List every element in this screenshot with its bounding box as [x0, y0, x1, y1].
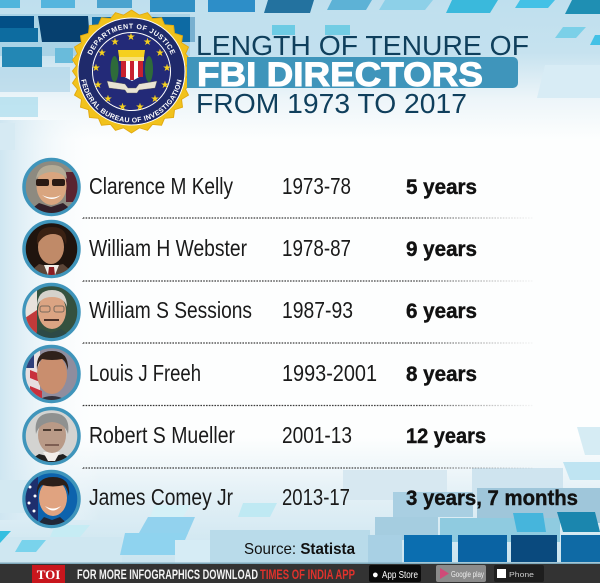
seal stars: ★ — [94, 80, 103, 91]
footer red text: TIMES OF INDIA APP — [260, 566, 355, 582]
FBI seal: FEDERAL BUREAU OF INVESTIGATION — [81, 79, 182, 122]
portrait: Mueller — [24, 408, 79, 464]
title highlight bar — [187, 57, 518, 88]
seal stars: ★ — [156, 48, 165, 59]
row: Louis J Freeh — [24, 346, 477, 402]
seal stars: ★ — [118, 102, 127, 113]
seal ring text: DEPARTMENT OF JUSTICE — [87, 24, 176, 55]
seal stars: ★ — [151, 94, 160, 105]
years in office: 1978-87 — [282, 235, 351, 261]
row dividers — [83, 218, 533, 468]
seal stars: ★ — [98, 48, 107, 59]
seal stars: ★ — [136, 102, 145, 113]
top blue tile pattern — [0, 0, 600, 150]
name: Clarence M Kelly — [89, 173, 233, 199]
row: William S Sessions — [24, 284, 477, 340]
name: William S Sessions — [89, 297, 252, 323]
title line 1: LENGTH OF TENURE OF — [196, 30, 529, 61]
portrait: Comey — [24, 472, 79, 526]
FBI seal — [72, 10, 190, 134]
seal shield — [107, 50, 157, 93]
years in office: 1993-2001 — [282, 360, 377, 386]
footer text: FOR MORE INFOGRAPHICS DOWNLOAD — [77, 566, 258, 582]
row: Clarence M Kelly — [24, 160, 477, 214]
tenure: 5 years — [406, 176, 477, 199]
name: Robert S Mueller — [89, 422, 235, 448]
seal gold serrated edge — [72, 10, 190, 133]
bottom blue tile pattern — [0, 427, 600, 563]
tenure: 3 years, 7 months — [406, 487, 578, 510]
TOI logo — [32, 565, 65, 583]
app store badge: App Store — [382, 570, 418, 581]
years in office: 1987-93 — [282, 297, 353, 323]
row: William H Webster — [24, 222, 477, 276]
title — [187, 30, 529, 119]
seal stars: ★ — [104, 94, 113, 105]
tenure: 9 years — [406, 238, 477, 261]
portrait: Webster — [24, 222, 79, 276]
row: James Comey Jr — [24, 472, 578, 526]
seal stars: ★ — [127, 32, 136, 43]
source: Source: Statista — [244, 541, 355, 558]
google play badge: Google play — [451, 570, 484, 579]
name: Louis J Freeh — [89, 360, 201, 386]
years in office: 1973-78 — [282, 173, 351, 199]
portrait: Freeh — [24, 346, 79, 402]
tenure: 6 years — [406, 300, 477, 323]
years in office: 2013-17 — [282, 484, 350, 510]
app store badge — [369, 565, 421, 582]
title line 2: FBI DIRECTORS — [197, 56, 483, 94]
tenure: 8 years — [406, 363, 477, 386]
seal stars: ★ — [92, 63, 101, 74]
portrait: Sessions — [24, 284, 79, 340]
name: William H Webster — [89, 235, 247, 261]
TOI logo: TOI — [37, 567, 60, 582]
seal stars — [92, 32, 172, 113]
seal stars: ★ — [161, 80, 170, 91]
app store badge: ● — [372, 569, 379, 581]
tenure: 12 years — [406, 425, 486, 448]
portrait: Kelly — [24, 160, 80, 214]
title line 3: FROM 1973 TO 2017 — [196, 88, 467, 119]
seal stars: ★ — [163, 63, 172, 74]
seal stars: ★ — [111, 37, 120, 48]
windows phone badge: Phone — [509, 572, 534, 579]
row: Robert S Mueller — [24, 408, 486, 464]
years in office: 2001-13 — [282, 422, 352, 448]
windows phone badge — [494, 565, 544, 582]
seal stars: ★ — [143, 37, 152, 48]
name: James Comey Jr — [89, 484, 233, 510]
google play badge — [436, 565, 486, 582]
footer bar — [0, 562, 600, 583]
